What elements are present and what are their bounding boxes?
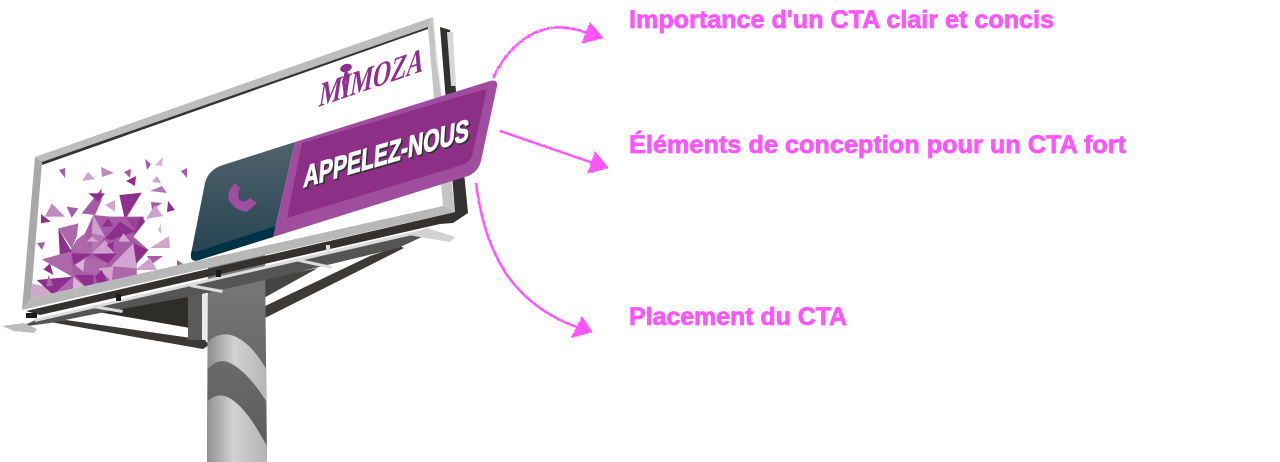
arrow: to placement [476,183,592,337]
fragment cluster [30,188,148,302]
logo: MIMOZA [317,41,427,115]
heading: importance: Importance d'un CTA clair et concis [629,6,1054,34]
scattered fragments [59,168,65,178]
catwalk rail [35,230,421,322]
icon: phone [228,183,257,212]
frame right bar [428,17,455,212]
right diagonal strut [263,246,404,319]
teal phone section [191,142,295,261]
frame left bar [22,157,42,310]
button label: APPELEZ-NOUS [302,113,470,195]
frame top bar [35,17,433,162]
billboard structure [2,17,468,462]
left diagonal strut [50,320,209,349]
arrow: to elements [500,131,608,173]
vertical column [188,293,209,340]
frame feet [26,313,37,318]
frame bottom bar [22,206,455,310]
bracket slats [2,323,37,333]
left dark gusset [98,295,190,328]
pole [205,250,270,462]
arrow: to importance [493,23,603,78]
pole band lower [205,395,268,462]
button label [302,113,472,196]
call to action button [191,81,497,261]
catwalk underside [20,232,424,327]
triangle artwork [30,157,187,302]
pole band upper [207,334,268,404]
frame backing [26,27,468,315]
button label: APPELEZ-NOUS [304,115,472,196]
heading: placement: Placement du CTA [629,303,847,331]
screen [31,27,443,298]
purple inner panel [287,90,486,218]
heading: elements: Éléments de conception pour un CTA fort [629,130,1127,159]
purple section [273,81,497,237]
icon: woman figure [339,62,353,96]
logo: MIMOZA: MIMOZA [317,41,427,115]
right gusset [262,268,318,299]
